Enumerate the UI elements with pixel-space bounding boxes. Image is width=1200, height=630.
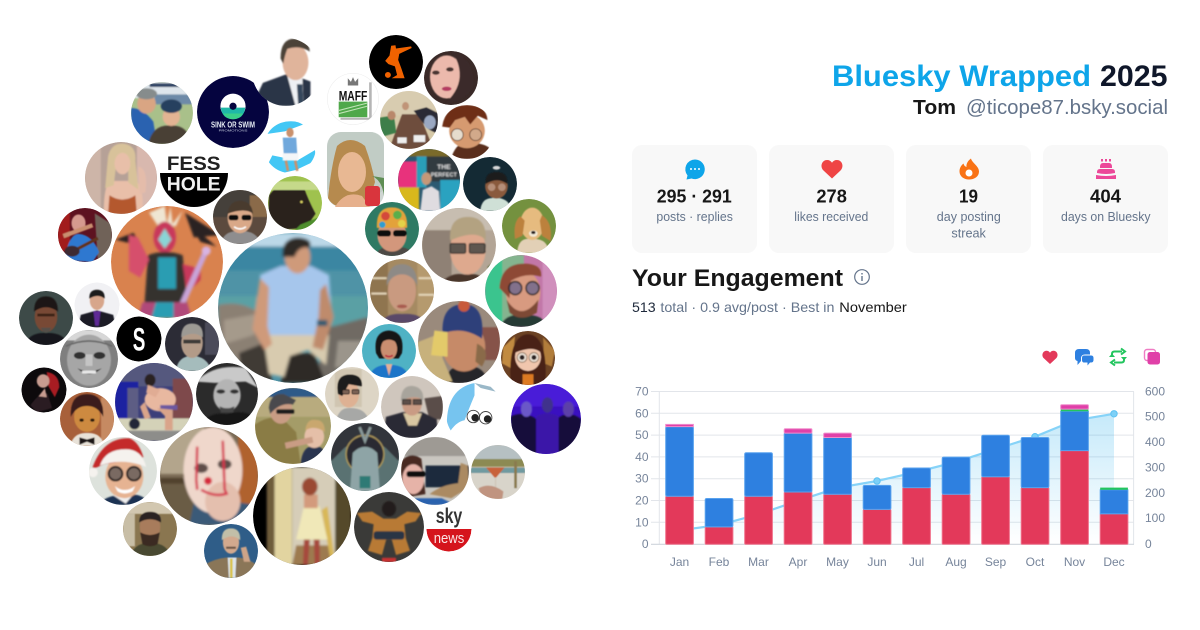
bar: Jun: [863, 485, 891, 544]
right axis labels: 500: [1145, 410, 1165, 424]
panel: days on Bluesky: [1043, 145, 1168, 253]
stat value: 278: [816, 185, 847, 206]
avatar: TV presenter: [204, 524, 258, 578]
avatar: blonde woman with red drink: [327, 132, 384, 207]
month labels: Oct: [1026, 555, 1045, 569]
avatar: grey-haired man with glasses: [422, 208, 496, 282]
engagement summary: [632, 299, 907, 315]
stat value: 19: [959, 185, 978, 206]
bar: Dec: [1100, 488, 1128, 544]
avatar: orange footballer logo: [369, 35, 423, 89]
bar: Aug: [942, 457, 970, 544]
avatar: blonde woman: [85, 142, 157, 214]
month labels: [670, 555, 1125, 569]
month labels: Jun: [867, 555, 887, 569]
avatar: man and toddler: [255, 388, 331, 464]
month labels: Sep: [985, 555, 1006, 569]
month labels: Aug: [945, 555, 967, 569]
right axis labels: [1145, 384, 1165, 551]
avatar: man in dark shirt on rock: [165, 317, 219, 371]
stat label: streak: [951, 226, 986, 240]
panel: posts and replies: [632, 145, 757, 253]
bar: Jan: [666, 424, 693, 544]
right axis labels: 600: [1145, 384, 1165, 398]
user name and handle: Tom: [913, 97, 956, 119]
month labels: May: [826, 555, 849, 569]
icon: flame: [960, 158, 979, 180]
avatar: man in suit: [254, 38, 312, 106]
avatar: MAFF logo: MAFF: [339, 88, 368, 104]
avatar: Fess Hole logo: [160, 153, 228, 207]
stat label: likes received: [794, 209, 868, 224]
avatar bubble cluster: [19, 35, 581, 578]
avatar: cartoon girl with glasses: [501, 331, 555, 385]
avatar: Sky News logo: news: [434, 531, 464, 547]
left axis labels: 0: [642, 537, 649, 551]
avatar: S logo: [116, 316, 162, 362]
avatar: black man portrait: [19, 291, 73, 345]
avatar: perfect guide poster: [398, 149, 460, 211]
stat label: [937, 209, 1001, 240]
stat value: 404: [1090, 185, 1122, 206]
user name and handle: @ticope87.bsky.social: [966, 97, 1168, 119]
bar: Oct: [1021, 438, 1049, 544]
avatar: Sink or Swim logo: SINK OR SWIM: [211, 119, 255, 129]
chart legend icons: [1042, 348, 1160, 366]
avatar: beach portrait main: [218, 233, 368, 383]
right axis labels: 100: [1145, 511, 1165, 525]
avatar: man with neon lights: [485, 255, 557, 327]
avatar: Sink or Swim logo: PROMOTIONS: [219, 128, 248, 132]
right axis labels: 200: [1145, 486, 1165, 500]
avatar: man in bobble hat: [418, 300, 500, 383]
month labels: Apr: [789, 555, 807, 569]
engagement summary: November: [839, 299, 907, 315]
avatar: woman in blue blazer: [362, 324, 416, 378]
avatar: dark-haired woman: [424, 51, 478, 105]
left axis labels: 30: [635, 472, 649, 486]
avatar: punk spider-man art: [111, 206, 223, 318]
icon: heart: [822, 160, 842, 178]
avatar: perfect guide poster: THE: [437, 164, 451, 171]
right axis labels: 0: [1145, 537, 1152, 551]
avatar: guitarist: [58, 208, 112, 262]
bar: May: [824, 433, 851, 544]
engagement chart: [635, 384, 1165, 569]
avatar: woman in sunglasses with cat: [401, 437, 469, 505]
month labels: Feb: [709, 555, 730, 569]
icon: birthday cake: [1096, 159, 1116, 179]
icon: info: [855, 270, 869, 284]
right axis labels: 300: [1145, 460, 1165, 474]
month labels: Jan: [670, 555, 689, 569]
month labels: Dec: [1103, 555, 1125, 569]
avatar: stadium selfie: [131, 82, 193, 144]
avatar: black panther: [268, 176, 322, 230]
avatar: boy in bow tie: [60, 392, 114, 446]
avatar: golden spaniel: [502, 199, 556, 253]
avatar: bearded man in glasses: [123, 502, 177, 556]
avatar: blue cartoon character: [446, 383, 496, 430]
left axis labels: 50: [635, 428, 649, 442]
avatar: man before bookcase: [370, 259, 434, 323]
month labels: Jul: [909, 555, 924, 569]
avatar: Pennywise face paint: [160, 427, 258, 525]
cumulative area and line: [680, 411, 1117, 544]
avatar: Sky News logo: sky: [436, 503, 462, 528]
avatar: Sink or Swim logo: [197, 76, 269, 148]
avatar: Sky News logo: [426, 503, 472, 552]
avatar: woman in floral dress mirror selfie: [253, 467, 351, 565]
avatar: grey-haired man on sofa: [381, 376, 443, 438]
avatar: Asian man with glasses: [325, 367, 379, 421]
avatar: S logo: S: [133, 321, 145, 357]
avatar: meeting room: [380, 91, 438, 149]
avatar: three people in purple light: [511, 384, 581, 454]
stat value: 295 · 291: [657, 185, 732, 206]
avatar: black and white man with hood: [196, 363, 258, 425]
avatar: man in sunglasses: [213, 190, 267, 244]
stat label: days on Bluesky: [1061, 209, 1151, 224]
panel: likes received: [769, 145, 894, 253]
panel: day posting streak: [906, 145, 1031, 253]
avatar: laughing old man black and white: [60, 330, 118, 388]
bar: Sep: [982, 435, 1009, 544]
icon: quotes squares: [1144, 350, 1160, 364]
bar: Nov: [1061, 405, 1088, 544]
avatar: Sumo figure from behind: [354, 492, 424, 562]
left axis labels: 60: [635, 406, 649, 420]
icon: repost arrows: [1109, 348, 1127, 366]
stacked bars: [666, 405, 1128, 544]
avatar: anime glasses character: [442, 105, 490, 159]
right axis labels: 400: [1145, 435, 1165, 449]
avatar: perfect guide poster: PERFECT: [431, 172, 457, 178]
bar: Feb: [705, 498, 733, 544]
left axis labels: [635, 384, 649, 551]
stat label: day posting: [937, 209, 1001, 224]
avatar: sumo wrestler at arena: [115, 363, 193, 441]
icon: replies bubbles: [1075, 349, 1094, 366]
month labels: Nov: [1064, 555, 1085, 569]
avatar: man in flower cap: [365, 202, 419, 256]
avatar: cocktail by the pool: [471, 445, 525, 499]
engagement summary: 513: [632, 299, 656, 315]
avatar: man in purple tie: [74, 282, 120, 328]
heading: Your Engagement: Your Engagement: [632, 265, 843, 292]
left axis labels: 20: [635, 494, 649, 508]
avatar: Fess Hole logo: FESS: [167, 153, 221, 175]
left axis labels: 70: [635, 384, 649, 398]
icon: speech bubble: [685, 160, 705, 180]
bar: Apr: [784, 429, 812, 544]
engagement summary: total · 0.9 avg/post · Best in: [660, 299, 834, 315]
avatar: little girl with glasses: [463, 157, 517, 211]
avatar: man in Santa hat: [88, 437, 157, 505]
bar: Jul: [903, 468, 930, 544]
avatar: blue footballer cut-out: [264, 121, 316, 173]
avatar: Fess Hole logo: HOLE: [167, 174, 221, 196]
stat label: posts · replies: [656, 209, 733, 224]
left axis labels: 10: [635, 515, 649, 529]
avatar: statue with hands on face: [331, 423, 399, 491]
left axis labels: 40: [635, 450, 649, 464]
title: Bluesky Wrapped: [832, 60, 1091, 93]
grid lines: [651, 392, 1134, 544]
avatar: red-haired woman in profile: [22, 368, 66, 412]
avatar: MAFF logo: [327, 73, 379, 125]
bar: Mar: [745, 453, 772, 544]
title: 2025: [1100, 60, 1168, 93]
month labels: Mar: [748, 555, 769, 569]
icon: likes heart: [1042, 351, 1058, 364]
